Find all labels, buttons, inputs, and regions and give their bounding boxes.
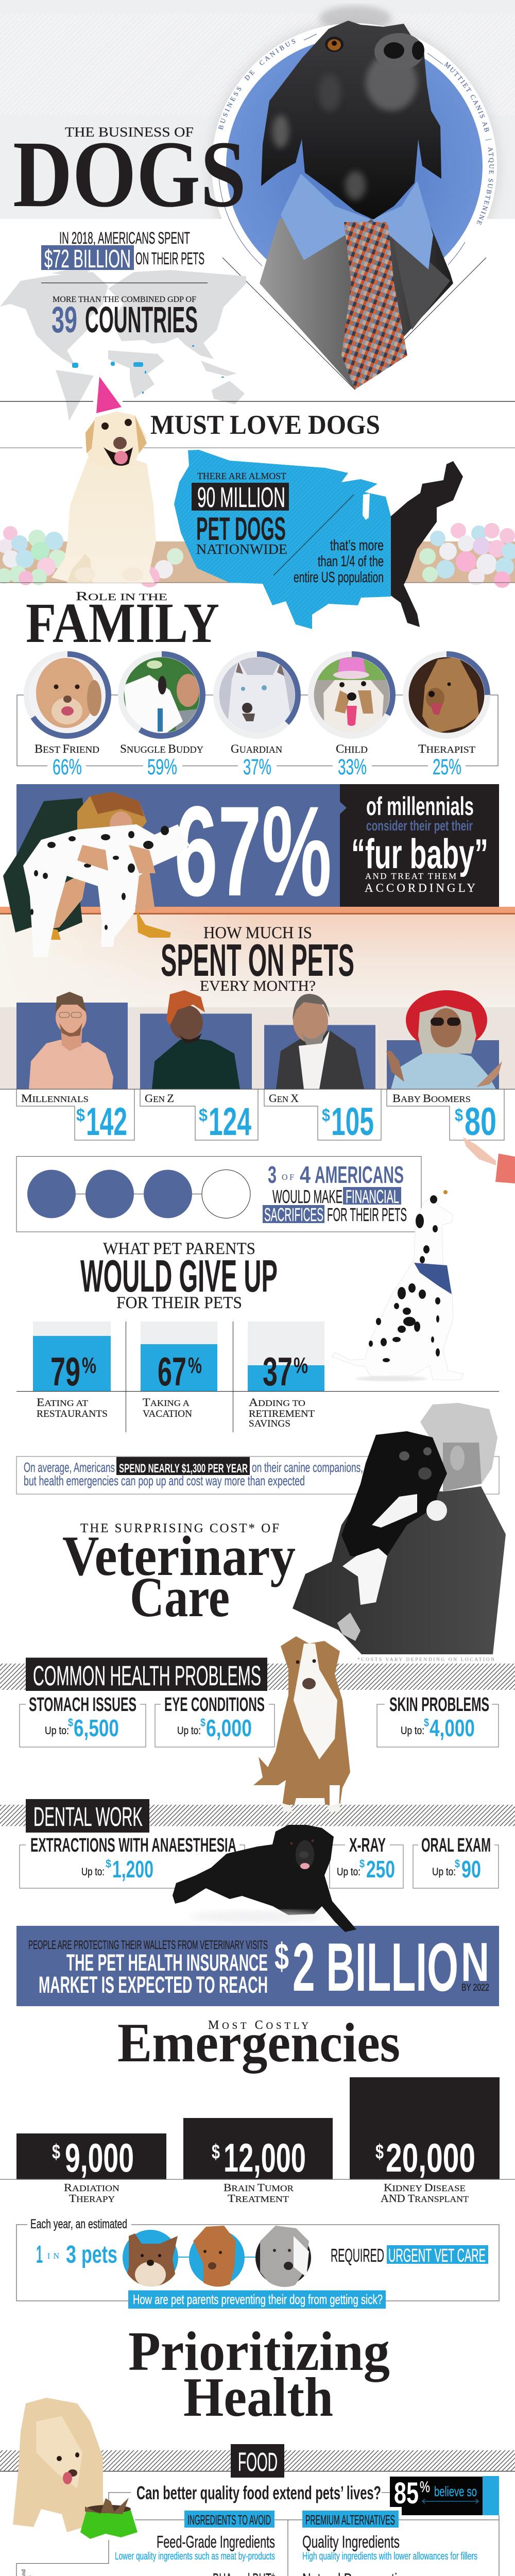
card: x-ray (330, 1835, 403, 1888)
card: x-ray: $ (359, 1857, 365, 1870)
hero: dog in shirt and tie (207, 3, 502, 390)
heading: how much is spent: EVERY MONTH? (200, 978, 316, 994)
shoes (36, 926, 61, 940)
panel: 3 of 4 americans: SACRIFICES (264, 1204, 323, 1225)
card: x-ray: X-RAY (349, 1835, 386, 1856)
column: premium alternatives: Quality Ingredients (302, 2532, 400, 2551)
card: extractions with anaesthesia: $ (106, 1857, 111, 1870)
dog portrait: chihuahua (123, 2230, 178, 2287)
card: x-ray: 250 (366, 1856, 395, 1883)
dog snout (374, 33, 424, 70)
card: extractions with anaesthesia: Up to: (81, 1866, 105, 1878)
bar: gen x: 105 (331, 1100, 374, 1144)
heading: prioritizing health: Health (183, 2367, 333, 2428)
bar: gen z (140, 990, 258, 1144)
role: child: 33% (338, 755, 367, 779)
card: eye conditions: Up to: (177, 1725, 201, 1737)
map captions: NATIONWIDE (196, 541, 287, 557)
map captions: that’s more (330, 537, 384, 554)
bar: gen x: $ (322, 1106, 330, 1125)
callout: spend nearly $1,300: SPEND NEARLY $1,300 PER YEAR (119, 1462, 248, 1476)
dog eye (325, 37, 344, 52)
map captions: entire US population (294, 569, 384, 586)
heading: surprising cost of veterinary care: Care (130, 1566, 230, 1629)
card: stomach issues: 6,500 (74, 1715, 119, 1741)
bowl (80, 2510, 138, 2539)
card: x-ray: Up to: (337, 1866, 360, 1878)
bar: taking a vacation: VACATION (143, 1409, 192, 1419)
question: better quality food: Can better quality food extend pets’ lives? (136, 2482, 381, 2503)
heading: prioritizing health (128, 2321, 390, 2428)
callout: spend nearly $1,300: on their canine companions, (252, 1460, 363, 1475)
panel: 1 in 3 pets urgent vet care: Each year, an estimated (30, 2217, 127, 2231)
bar: adding to retirement savings (248, 1321, 324, 1429)
heading: prioritizing health: Prioritizing (128, 2321, 390, 2382)
card: skin problems: 4,000 (430, 1715, 475, 1741)
panel: 1 in 3 pets urgent vet care: 1 (36, 2241, 43, 2268)
stat: $72 billion: IN 2018, AMERICANS SPENT (59, 229, 190, 247)
role: child (308, 651, 397, 779)
role: guardian: GUARDIAN (231, 742, 282, 755)
woman hair and face (77, 792, 147, 866)
bar: kidney disease: KIDNEY DISEASE (384, 2181, 466, 2194)
bar: eating at restaurants (33, 1321, 111, 1419)
role: snuggle buddy: SNUGGLE BUDDY (120, 742, 203, 755)
band: common health problems: COMMON HEALTH PROBLEMS (33, 1660, 261, 1691)
bar: adding to retirement savings: % (294, 1353, 308, 1378)
heading: would give up: FOR THEIR PETS (116, 1294, 242, 1312)
heading: how much is spent: HOW MUCH IS (203, 924, 312, 942)
man head (420, 1403, 497, 1489)
lake (363, 494, 370, 520)
footnote: costs vary: *COSTS VARY DEPENDING ON LOCATION (357, 1657, 494, 1663)
bar: millennials (16, 992, 134, 1144)
heading: how much is spent: SPENT ON PETS (161, 935, 354, 986)
heading: surprising cost of veterinary care (62, 1521, 296, 1629)
bar: eating at restaurants: 79 (50, 1349, 80, 1394)
card: extractions with anaesthesia (20, 1835, 245, 1888)
panel: 1 in 3 pets urgent vet care (16, 2217, 499, 2309)
map captions: 90 MILLION (197, 481, 285, 513)
bar: radiation therapy: 9,000 (65, 2135, 134, 2180)
chart: most costly emergencies (0, 2077, 515, 2205)
chart: what pet parents would give up (16, 1321, 499, 1432)
dog body in triangle (260, 218, 453, 389)
role: guardian: 37% (243, 755, 271, 779)
photo: man hugging black dog (293, 1403, 506, 1654)
heading: surprising cost of veterinary care: THE SURPRISING COST* OF (80, 1521, 279, 1535)
card: stomach issues: Up to: (45, 1725, 69, 1737)
panel: pet health insurance: $ (274, 1936, 289, 1977)
dalmatian (23, 824, 190, 957)
card: skin problems (377, 1694, 499, 1747)
role: guardian (213, 651, 301, 779)
band: dental work: DENTAL WORK (33, 1802, 143, 1832)
illustration: black dog lying down (173, 1825, 356, 1932)
card: eye conditions: EYE CONDITIONS (164, 1694, 265, 1716)
heading: how much is spent (161, 924, 354, 994)
section rules (0, 401, 515, 448)
bar: brain tumor treatment: $ (212, 2141, 220, 2163)
panel: 3 of 4 americans: OF (282, 1173, 294, 1182)
bar: brain tumor treatment (183, 2118, 333, 2205)
heading: role in the family: FAMILY (26, 591, 219, 654)
band: food (0, 2444, 515, 2478)
bar: adding to retirement savings: SAVINGS (249, 1418, 290, 1429)
bar: millennials: MILLENNIALS (21, 1092, 89, 1105)
man hand (337, 1613, 360, 1641)
woman arms (77, 845, 108, 871)
panel: pet health insurance (16, 1926, 499, 2006)
banner: 67 percent of millennials: AND TREAT THEM (365, 871, 456, 881)
title: DOGS (13, 122, 246, 227)
floor background (0, 907, 515, 1089)
panel: 1 in 3 pets urgent vet care: IN (47, 2252, 59, 2261)
stat: 39 countries: 39 (52, 300, 77, 341)
card: extractions with anaesthesia: EXTRACTIONS WITH ANAESTHESIA (30, 1835, 236, 1856)
bar: adding to retirement savings: RETIREMENT (249, 1409, 315, 1419)
photo: balls and floor (0, 523, 515, 588)
food frame lines (16, 2493, 499, 2576)
bar: gen z: GEN Z (145, 1092, 174, 1105)
panel: pet health insurance: BY 2022 (461, 1982, 489, 1993)
illustration: tan pit bull (253, 1636, 350, 1812)
card: eye conditions: $ (200, 1716, 205, 1729)
column: ingredients to avoid: Lower quality ingredients such as meat by-products (115, 2551, 275, 2562)
usa map west (174, 450, 391, 629)
role: snuggle buddy (118, 651, 205, 779)
band: food: FOOD (238, 2447, 278, 2477)
column: ingredients to avoid: Feed-Grade Ingredients (157, 2532, 275, 2551)
stat: 39 countries (52, 295, 198, 341)
map captions (192, 471, 384, 586)
panel: pet health insurance: MARKET IS EXPECTED TO REACH (39, 1972, 268, 1998)
bar: kidney disease: 20,000 (386, 2135, 475, 2180)
stat: 39 countries: MORE THAN THE COMBINED GDP OF (53, 295, 196, 304)
panel: pet health insurance: N (461, 1931, 489, 1993)
panel: 3 of 4 americans: AMERICANS (315, 1161, 404, 1188)
card: oral exam: $ (455, 1857, 460, 1870)
role: best friend: 66% (53, 755, 82, 779)
bar: millennials: $ (76, 1106, 85, 1125)
stat: 85 percent believe so: 85 (394, 2477, 419, 2510)
bar: kidney disease: AND TRANSPLANT (381, 2192, 469, 2205)
card: oral exam: 90 (461, 1856, 481, 1883)
panel: 3 of 4 americans (16, 1156, 421, 1232)
dog muzzle highlights (272, 54, 417, 200)
role: snuggle buddy: 59% (147, 755, 177, 779)
dalmatian spots (30, 826, 169, 930)
illustration: hand with treat (443, 1137, 515, 1194)
bar: millennials: 142 (86, 1100, 127, 1144)
bar: baby boomers: 80 (465, 1100, 496, 1144)
role: therapist: THERAPIST (418, 742, 475, 755)
family frame lines (17, 695, 498, 766)
column: premium alternatives (302, 2511, 477, 2576)
card: oral exam (413, 1835, 499, 1888)
bar: radiation therapy: $ (52, 2141, 60, 2163)
black dog (341, 1431, 447, 1561)
card: stomach issues (20, 1694, 146, 1747)
illustration: dalmatian catching treat (332, 1195, 464, 1381)
bar: taking a vacation: % (188, 1353, 202, 1378)
role: child: CHILD (336, 742, 368, 755)
banner: 67 percent of millennials: ACCORDINGLY (365, 882, 475, 894)
map captions: PET DOGS (196, 511, 286, 547)
stat: $72 billion: ON THEIR PETS (135, 249, 204, 268)
triangle outline (222, 258, 486, 389)
usa map east (391, 461, 463, 627)
illustration: shaggy dog and bowl (13, 2398, 138, 2539)
stat: $72 billion: $72 BILLION (44, 245, 131, 273)
stat: 85 percent believe so: believe so (434, 2484, 477, 2499)
column: ingredients to avoid (101, 2511, 275, 2576)
panel: 3 of 4 americans: FINANCIAL (346, 1186, 399, 1207)
role: therapist: 25% (433, 755, 461, 779)
bar: eating at restaurants: % (82, 1353, 96, 1378)
woman legs (44, 871, 88, 930)
bar: brain tumor treatment: TREATMENT (228, 2192, 289, 2205)
stat: 85 percent believe so: % (420, 2479, 430, 2496)
role: best friend: BEST FRIEND (35, 742, 99, 755)
bar: eating at restaurants: RESTAURANTS (37, 1409, 108, 1419)
banner: 67 percent of millennials (16, 779, 499, 923)
bar: gen z: 124 (209, 1100, 251, 1144)
medallion ring (218, 34, 465, 266)
background: header band (0, 0, 515, 219)
panel: 3 of 4 americans: WOULD MAKE (272, 1186, 342, 1207)
bar: kidney disease: $ (375, 2141, 384, 2163)
bar: baby boomers (386, 990, 504, 1144)
panel: 1 in 3 pets urgent vet care: REQUIRED (331, 2245, 384, 2266)
panel: 3 of 4 americans: 3 (268, 1161, 277, 1188)
collar (281, 174, 433, 269)
dog head (261, 21, 441, 219)
illustration: labrador with party hat (52, 377, 156, 583)
dog portrait: grey terrier (255, 2226, 311, 2287)
panel: 1 in 3 pets urgent vet care: pets (81, 2241, 117, 2268)
world map (0, 270, 246, 421)
rim lettering right: MUTTIET CANIS AB | ATQUE SUBTENINE (444, 62, 494, 225)
bar: baby boomers: BABY BOOMERS (392, 1092, 471, 1105)
map captions: than 1/4 of the (318, 553, 384, 570)
card: skin problems: $ (424, 1716, 429, 1729)
necktie (341, 222, 407, 389)
panel: pet health insurance: PEOPLE ARE PROTECTING THEIR WALLETS FROM VETERINARY VISITS (28, 1938, 268, 1952)
bar: gen x: GEN X (269, 1092, 299, 1105)
band: dental work (0, 1799, 515, 1833)
card: eye conditions (155, 1694, 274, 1747)
panel: pet health insurance: THE PET HEALTH INSURANCE (66, 1950, 268, 1976)
bar: brain tumor treatment: 12,000 (224, 2135, 306, 2180)
card: skin problems: Up to: (401, 1725, 424, 1737)
baseline rule (0, 1089, 515, 1090)
heading: would give up (80, 1240, 278, 1312)
map highlights: countries (72, 345, 224, 394)
column: premium alternatives: PREMIUM ALTERNATIVES (305, 2512, 395, 2528)
heading: would give up: WOULD GIVE UP (80, 1250, 278, 1301)
heading: most costly emergencies: M OST C OSTLY (208, 2019, 308, 2032)
role: best friend (24, 651, 111, 779)
callout: spend nearly $1,300 (16, 1456, 499, 1494)
stat: 85 percent believe so (390, 2476, 499, 2515)
card: stomach issues: STOMACH ISSUES (29, 1694, 136, 1716)
bar: radiation therapy: RADIATION (64, 2181, 119, 2194)
stat: $72 billion (41, 229, 208, 283)
bar: radiation therapy: THERAPY (69, 2192, 115, 2205)
card: stomach issues: $ (68, 1716, 73, 1729)
panel: 1 in 3 pets urgent vet care: How are pet parents preventing their dog from getting sick? (133, 2292, 383, 2307)
card: eye conditions: 6,000 (206, 1715, 252, 1741)
map captions: THERE ARE ALMOST (197, 471, 286, 481)
man coat (293, 1485, 506, 1654)
card: oral exam: Up to: (432, 1866, 456, 1878)
panel: 1 in 3 pets urgent vet care: 3 (66, 2241, 76, 2268)
role: therapist (403, 651, 490, 779)
panel: 3 of 4 americans: 4 (300, 1161, 311, 1188)
callout: spend nearly $1,300: On average, Americans (24, 1460, 115, 1475)
panel: 3 of 4 americans: FOR THEIR PETS (327, 1204, 407, 1225)
bar: gen x (264, 994, 381, 1144)
bar: eating at restaurants: EATING AT (37, 1396, 89, 1409)
heading: would give up: WHAT PET PARENTS (103, 1240, 255, 1258)
woman dress (3, 798, 88, 935)
heading: most costly emergencies: Emergencies (117, 2012, 400, 2074)
bar: kidney disease (350, 2077, 500, 2205)
bar: taking a vacation: 67 (158, 1349, 186, 1394)
bar: taking a vacation (141, 1321, 217, 1419)
medallion blue (226, 38, 483, 294)
column: ingredients to avoid: INGREDIENTS TO AVOID (187, 2512, 271, 2528)
bar: baby boomers: $ (455, 1106, 463, 1125)
dog portrait: vizsla (189, 2226, 245, 2287)
bar: adding to retirement savings: ADDING TO (249, 1396, 305, 1409)
stat: 39 countries: COUNTRIES (85, 300, 198, 341)
bar: adding to retirement savings: 37 (263, 1349, 293, 1394)
title: THE BUSINESS OF (65, 125, 194, 140)
callout: spend nearly $1,300: but health emergencies can pop up and cost way more than expected (24, 1473, 305, 1488)
bar: gen z: $ (199, 1106, 208, 1125)
bar: radiation therapy (16, 2133, 166, 2205)
heading: surprising cost of veterinary care: Veterinary (62, 1524, 296, 1587)
card: extractions with anaesthesia: 1,200 (112, 1856, 153, 1883)
bar: brain tumor treatment: BRAIN TUMOR (224, 2181, 294, 2194)
rim lettering left: BUSINESS DE CANIBUS (218, 39, 296, 130)
bar: taking a vacation: TAKING A (143, 1396, 190, 1409)
photo: woman hugging dalmatian (3, 792, 190, 957)
banner: 67 percent of millennials: 67% (174, 779, 332, 923)
heading: role in the family: R OLE IN THE (76, 590, 167, 603)
heading: must love dogs: MUST LOVE DOGS (150, 410, 380, 440)
